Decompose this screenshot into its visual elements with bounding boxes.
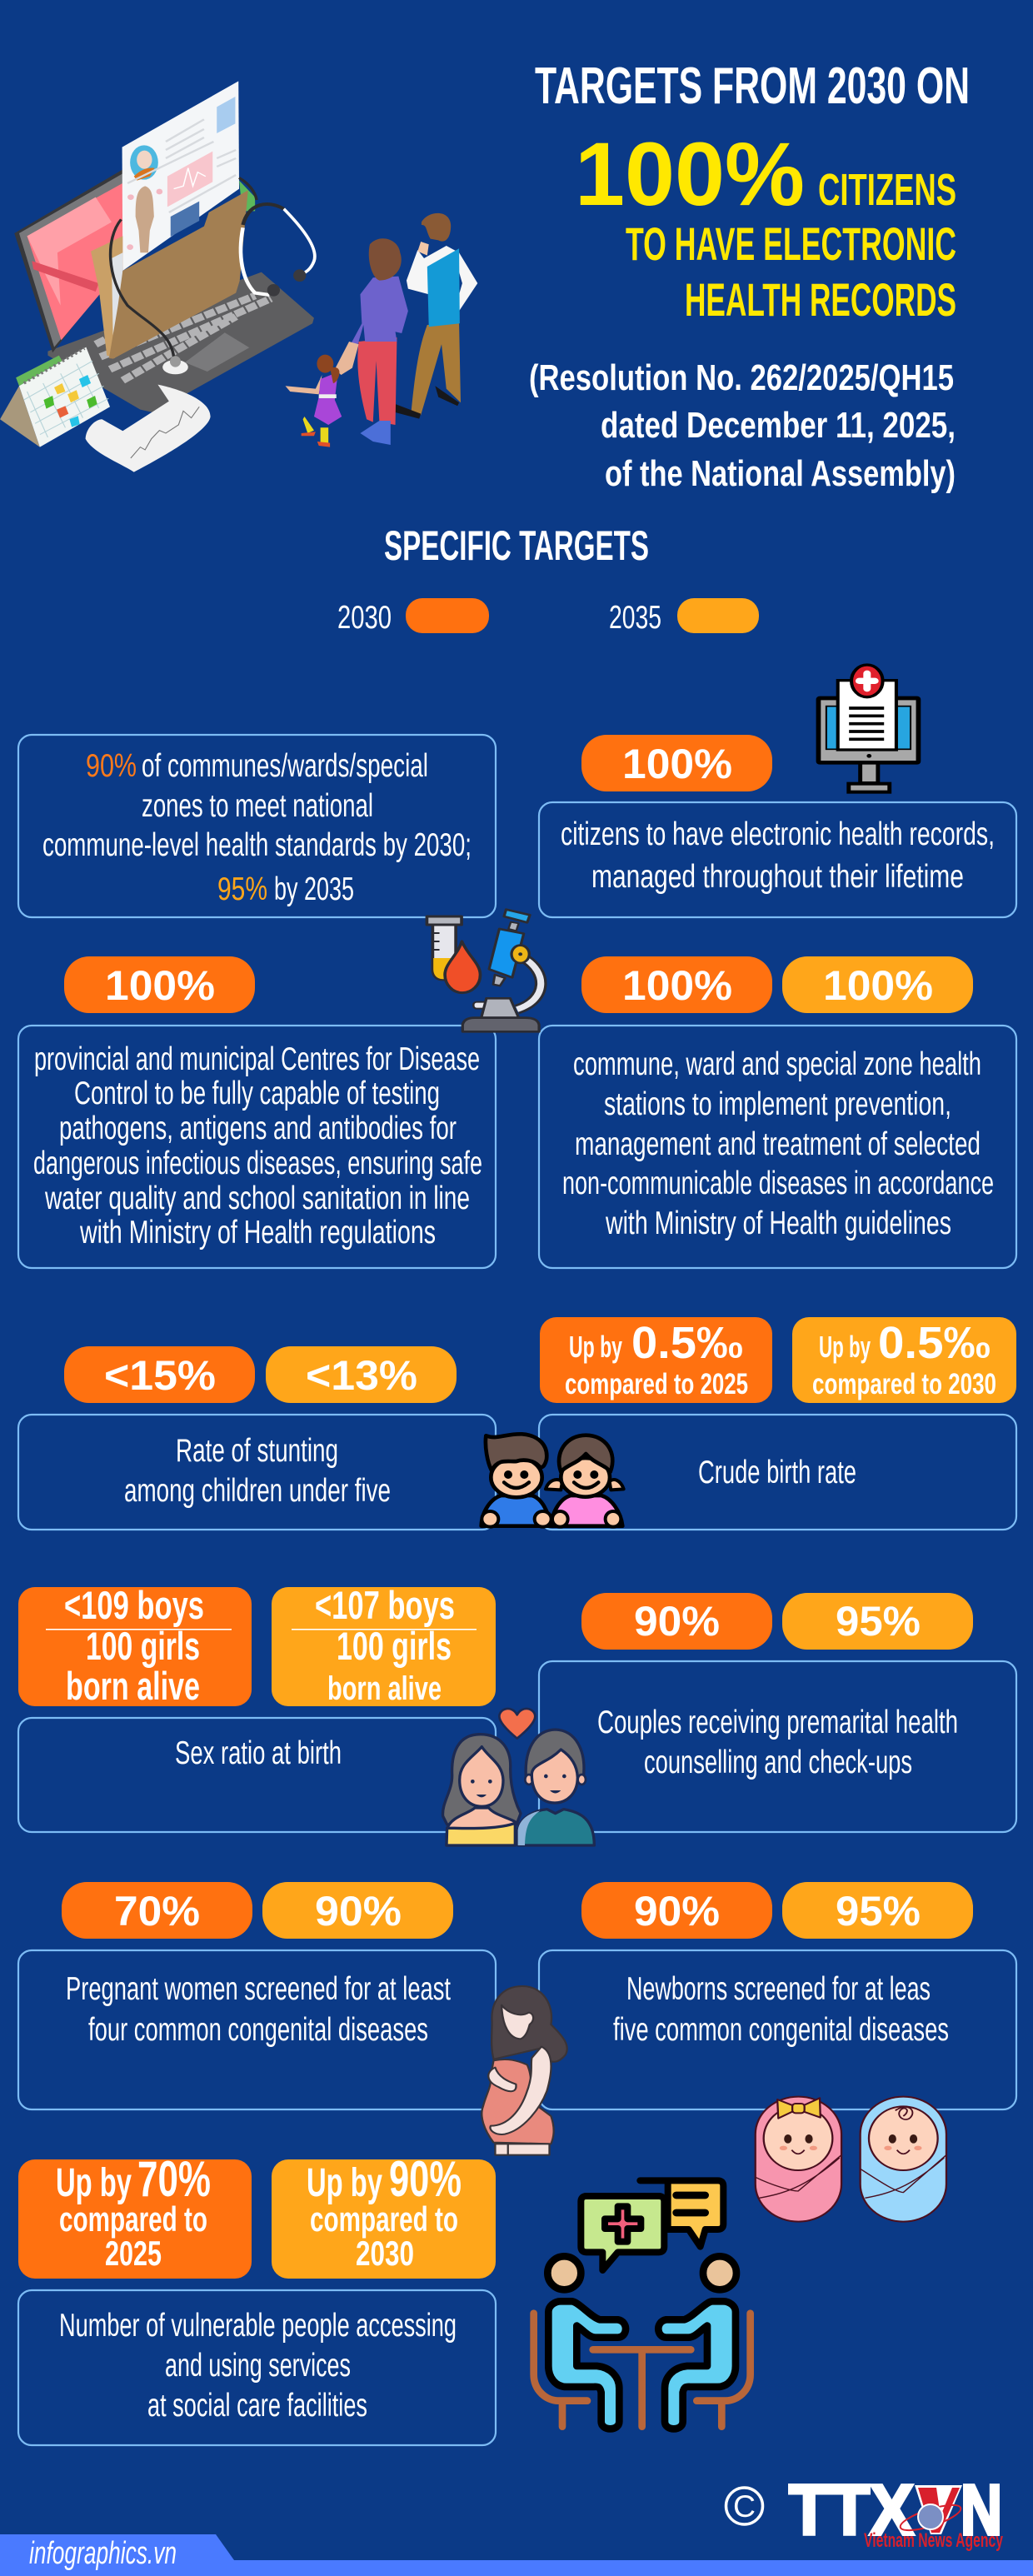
pills: premarital counselling: 90% xyxy=(634,1598,720,1645)
badges: sex ratio targets: born alive xyxy=(327,1670,442,1707)
pill: 100% citizens xyxy=(581,735,772,791)
badges: social care targets: 2025 xyxy=(105,2234,162,2273)
man xyxy=(396,213,477,419)
pills: stunting rate xyxy=(64,1346,457,1403)
badges: social care targets: 70% xyxy=(137,2151,211,2207)
icon: two people consulting at a table xyxy=(534,2180,751,2429)
badges: crude birth rate targets: Up by xyxy=(819,1330,871,1364)
panel: electronic health records xyxy=(539,802,1016,917)
panel: centres for disease control: pathogens, antigens and antibodies for xyxy=(59,1111,457,1146)
legend xyxy=(337,598,759,636)
badges: social care targets: compared to xyxy=(59,2199,207,2239)
badges: social care targets: Up by xyxy=(307,2161,382,2205)
footer bar with website xyxy=(0,2534,1033,2576)
blood drop xyxy=(445,941,480,993)
panel: newborn screening xyxy=(539,1950,1016,2109)
stethoscope xyxy=(111,177,315,374)
headline: 100% citizens to have electronic health records: 100% xyxy=(575,123,805,224)
badges: social care targets: 90% xyxy=(389,2151,462,2207)
panel: commune health standards: by 2035 xyxy=(274,871,354,907)
panel: centres for disease control: provincial and municipal Centres for Disease xyxy=(34,1041,480,1077)
icon: computer with medical record xyxy=(818,665,918,792)
panel: commune health standards: 90% xyxy=(86,748,137,784)
headline: 100% citizens to have electronic health records: CITIZENS xyxy=(818,165,956,215)
baby boy xyxy=(861,2097,946,2222)
panel: centres for disease control: with Ministry of Health regulations xyxy=(79,1215,436,1251)
baby girl xyxy=(756,2097,841,2222)
panel: social care facilities: Number of vulnerable people accessing xyxy=(59,2308,457,2344)
pills: 100% health stations xyxy=(581,956,973,1013)
badges: sex ratio targets: <109 boys xyxy=(64,1583,204,1627)
logo: TTXVN Vietnam News Agency: N xyxy=(961,2471,1002,2550)
left person xyxy=(534,2256,626,2429)
badges: sex ratio targets: born alive xyxy=(66,1664,200,1708)
panel: premarital check-ups: counselling and check-ups xyxy=(644,1745,912,1780)
heading: specific targets: SPECIFIC TARGETS xyxy=(384,522,649,569)
badges: sex ratio targets: <107 boys xyxy=(315,1583,455,1627)
badges: social care targets xyxy=(18,2151,496,2279)
table xyxy=(593,2349,691,2427)
pills: stunting rate: <13% xyxy=(306,1352,417,1399)
man xyxy=(518,1730,594,1845)
panel: sex ratio: Sex ratio at birth xyxy=(175,1735,342,1771)
pills: 100% health stations: 100% xyxy=(622,962,732,1009)
panel: social care facilities: and using services xyxy=(165,2348,351,2384)
pills: pregnant women xyxy=(62,1882,453,1939)
badges: sex ratio targets: 100 girls xyxy=(86,1624,200,1668)
badges: social care targets: Up by xyxy=(56,2161,132,2205)
girl xyxy=(546,1435,624,1527)
badges: sex ratio targets: 100 girls xyxy=(337,1624,452,1668)
illustration: laptop with electronic health record, family xyxy=(0,81,477,472)
icon: pregnant woman xyxy=(482,1986,567,2155)
badges: crude birth rate targets: Up by xyxy=(569,1330,622,1364)
panel: commune health standards: 95% xyxy=(217,871,267,907)
panel: commune health standards: of communes/wards/special xyxy=(142,748,428,784)
pills: newborns xyxy=(581,1882,973,1939)
headline: 100% citizens to have electronic health records xyxy=(575,123,956,326)
health record sheet xyxy=(122,81,239,271)
yellow speech bubble xyxy=(640,2180,723,2247)
woman xyxy=(349,238,408,445)
laptop screen xyxy=(14,167,127,352)
footer bar with website: infographics.vn xyxy=(29,2536,177,2571)
logo: TTXVN Vietnam News Agency xyxy=(789,2471,1003,2552)
folder xyxy=(91,181,255,359)
panel: centres for disease control: dangerous infectious diseases, ensuring safe xyxy=(33,1146,482,1181)
badges: crude birth rate targets: 0.5‰ xyxy=(878,1318,991,1368)
icon: boy and girl xyxy=(482,1434,624,1527)
pills: pregnant women: 70% xyxy=(114,1888,200,1934)
pill: 100% disease control xyxy=(64,956,255,1013)
logo: TTXVN Vietnam News Agency: TTX xyxy=(789,2471,914,2550)
badges: sex ratio targets xyxy=(18,1583,496,1708)
pills: premarital counselling: 95% xyxy=(836,1598,921,1645)
heart xyxy=(499,1709,535,1739)
legend: 2030 xyxy=(337,600,392,636)
panel: centres for disease control: Control to be fully capable of testing xyxy=(74,1076,440,1111)
woman xyxy=(443,1735,521,1845)
panel: sex ratio xyxy=(18,1718,496,1832)
panel: commune health standards: zones to meet national xyxy=(142,788,373,824)
test tube xyxy=(427,916,462,980)
panel: social care facilities xyxy=(18,2290,496,2445)
pills: newborns: 90% xyxy=(634,1888,720,1934)
pill: 100% disease control: 100% xyxy=(105,962,215,1009)
legend: 2035 xyxy=(609,600,661,636)
icon: newborn babies xyxy=(756,2097,946,2222)
panel: stunting: Rate of stunting xyxy=(176,1433,338,1469)
panel: centres for disease control: water quality and school sanitation in line xyxy=(44,1181,470,1216)
badges: crude birth rate targets: 0.5‰ xyxy=(631,1318,743,1368)
pills: 100% health stations: 100% xyxy=(823,962,933,1009)
pills: premarital counselling xyxy=(581,1593,973,1650)
copyright symbol: C xyxy=(733,2489,756,2524)
panel: crude birth rate: Crude birth rate xyxy=(698,1455,856,1490)
panel: commune health stations xyxy=(539,1026,1016,1268)
pills: stunting rate: <15% xyxy=(104,1352,216,1399)
laptop base xyxy=(47,272,314,412)
badges: social care targets: compared to xyxy=(310,2199,458,2239)
panel: commune health standards: commune-level health standards by 2030; xyxy=(42,827,472,863)
calendar xyxy=(0,347,110,447)
panel: pregnant women screening xyxy=(18,1950,496,2109)
pills: pregnant women: 90% xyxy=(315,1888,402,1934)
badges: crude birth rate targets: compared to 2025 xyxy=(565,1368,748,1400)
panel: stunting: among children under five xyxy=(124,1473,391,1509)
panel: premarital check-ups xyxy=(539,1661,1016,1832)
icon: test tube, blood drop and microscope xyxy=(427,910,541,1031)
green speech bubble xyxy=(581,2196,664,2270)
badges: social care targets: 2030 xyxy=(356,2234,414,2273)
panel: crude birth rate xyxy=(539,1415,1016,1530)
icon: couple with heart xyxy=(443,1709,594,1845)
pill: 100% citizens: 100% xyxy=(622,741,732,787)
right person xyxy=(658,2256,751,2429)
panel: centres for disease control xyxy=(18,1026,496,1268)
pills: newborns: 95% xyxy=(836,1888,921,1934)
microscope xyxy=(462,910,541,1031)
boy xyxy=(482,1434,551,1527)
panel: pregnant women screening: Pregnant women screened for at least xyxy=(66,1971,451,2007)
badges: crude birth rate targets xyxy=(540,1317,1016,1403)
copyright symbol xyxy=(726,2488,763,2524)
panel: social care facilities: at social care facilities xyxy=(147,2388,367,2424)
girl xyxy=(286,342,359,447)
panel: commune health standards xyxy=(18,735,496,917)
panel: pregnant women screening: four common congenital diseases xyxy=(88,2012,428,2048)
panel: stunting xyxy=(18,1415,496,1530)
text: resolution reference xyxy=(529,357,956,494)
ECG paper xyxy=(86,385,211,472)
